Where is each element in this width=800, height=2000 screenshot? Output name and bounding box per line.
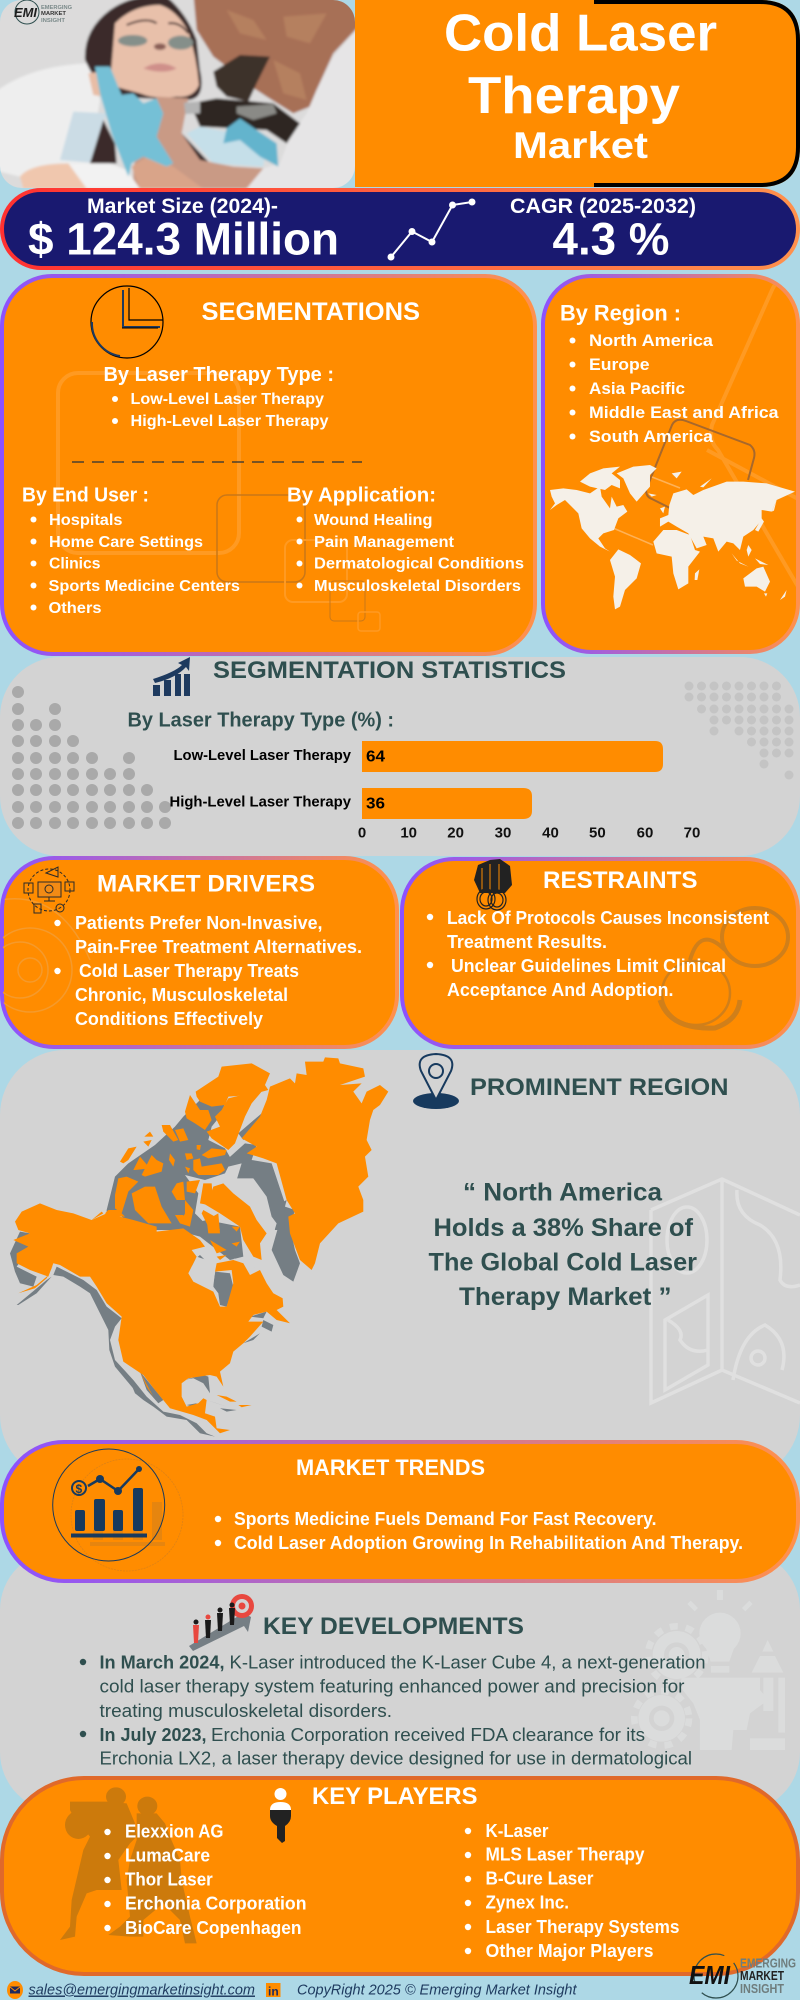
world map	[550, 465, 795, 609]
list: players left column: BioCare Copenhagen	[125, 1918, 302, 1938]
icon: bar chart with dollar sign: $	[76, 1482, 82, 1496]
logo: Emerging Market Insight: INSIGHT	[740, 1982, 784, 1996]
icon: handcuffs and fist	[474, 859, 512, 910]
panel: key developments	[0, 1550, 800, 1812]
list: by application: Musculoskeletal Disorders	[314, 578, 521, 595]
panel: prominent region: PROMINENT REGION	[470, 1074, 728, 1101]
text block: development items	[80, 1652, 706, 1768]
list: by application: Pain Management	[314, 534, 455, 551]
panel: market drivers: Chronic, Musculoskeletal	[75, 985, 288, 1005]
icon: rising bars with arrow	[153, 657, 190, 696]
panel: by region: Middle East and Africa	[589, 403, 779, 422]
list: by application: By Application:	[287, 484, 436, 506]
panel: market drivers: Cold Laser Therapy Treats	[79, 961, 299, 981]
logo on photo	[14, 0, 72, 24]
list: by laser therapy type: High-Level Laser Therapy	[130, 413, 329, 430]
list: players right column: Laser Therapy Systems	[486, 1917, 680, 1937]
list: by laser therapy type: By Laser Therapy Type :	[104, 364, 334, 386]
bar chart: High-Level Laser Therapy	[170, 794, 351, 810]
text block: development items: Erchonia LX2, a laser therapy device designed for use in dermatological	[100, 1748, 692, 1768]
text block: development items: In July 2023,	[100, 1725, 206, 1745]
bar chart: 40	[542, 824, 559, 842]
icon: location pin	[413, 1054, 459, 1109]
decorative gears, bulb and pencil	[634, 1590, 785, 1750]
panel: by region: By Region :	[560, 300, 681, 326]
panel: key players	[2, 1778, 798, 1974]
bar chart: Low-Level Laser Therapy	[174, 748, 351, 764]
quote: North America share: “ North America	[463, 1178, 663, 1206]
quote: North America share	[428, 1178, 697, 1311]
panel: market drivers: MARKET DRIVERS	[97, 870, 315, 898]
panel: segmentations	[2, 276, 535, 654]
bar chart: 60	[637, 824, 653, 842]
panel: by region: North America	[589, 331, 714, 350]
panel: segmentation statistics: SEGMENTATION STATISTICS	[213, 657, 566, 684]
panel: market drivers: Conditions Effectively	[75, 1009, 263, 1029]
text block: development items: cold laser therapy system featuring enhanced power and precision for	[100, 1676, 685, 1696]
panel: market drivers: Patients Prefer Non-Invasive,	[75, 913, 322, 933]
decorative dots left	[12, 686, 171, 829]
list: by end user: By End User :	[22, 484, 149, 506]
icon: marketing cycle	[24, 867, 74, 913]
bar chart	[170, 741, 700, 842]
icon: bar chart with dollar sign	[53, 1449, 183, 1571]
icon: LinkedIn: in	[268, 1984, 279, 1998]
list: players left column: LumaCare	[125, 1846, 210, 1866]
panel: market trends: Sports Medicine Fuels Demand For Fast Recovery.	[234, 1509, 656, 1529]
icon: pie chart	[91, 286, 163, 358]
panel: prominent region	[0, 1050, 800, 1480]
bar chart: 50	[589, 824, 606, 842]
list: players right column	[465, 1821, 680, 1961]
panel: by region: Asia Pacific	[589, 379, 685, 398]
quote: North America share: The Global Cold Laser	[428, 1248, 697, 1276]
text block: development items: K-Laser introduced the K-Laser Cube 4, a next-generation	[230, 1652, 706, 1672]
panel: market trends: Cold Laser Adoption Growing In Rehabilitation And Therapy.	[234, 1533, 743, 1553]
panel: segmentation statistics: By Laser Therapy Type (%) :	[128, 710, 394, 732]
list: players right column: B-Cure Laser	[486, 1868, 594, 1888]
decorative dots right	[684, 682, 794, 780]
panel: restraints: RESTRAINTS	[543, 867, 698, 894]
list: players right column: Zynex Inc.	[486, 1892, 569, 1912]
list: players right column: Other Major Players	[486, 1941, 654, 1961]
title panel: Cold Laser	[444, 4, 717, 62]
panel: by region	[543, 276, 800, 652]
list: by application: Wound Healing	[314, 512, 432, 529]
list: by end user: Hospitals	[49, 512, 123, 529]
list: players left column	[104, 1822, 306, 1938]
list: players right column: MLS Laser Therapy	[486, 1844, 644, 1864]
footer: contact and copyright: CopyRight 2025 © Emerging Market Insight	[297, 1982, 577, 1998]
bar chart: 36	[366, 796, 385, 812]
footer: contact and copyright: sales@emergingmarketinsight.com	[28, 1982, 255, 1998]
bar chart: 70	[684, 824, 700, 842]
text block: development items: In March 2024,	[100, 1652, 224, 1672]
text block: development items: treating musculoskeletal disorders.	[100, 1701, 392, 1721]
logo on photo: EMI	[14, 5, 37, 20]
title panel: Market	[513, 125, 648, 166]
panel: market trends	[2, 1442, 798, 1581]
list: by laser therapy type	[104, 364, 334, 430]
stat bar: market size and CAGR: 4.3 %	[552, 214, 670, 264]
text block: development items: Erchonia Corporation received FDA clearance for its	[211, 1725, 645, 1745]
list: by end user: Clinics	[49, 556, 101, 572]
header photo: patient receiving laser treatment	[0, 0, 362, 200]
bar chart: 20	[447, 824, 464, 842]
stat bar: market size and CAGR: $ 124.3 Million	[28, 214, 339, 264]
panel: key players: KEY PLAYERS	[312, 1783, 478, 1810]
list: by laser therapy type: Low-Level Laser Therapy	[130, 391, 324, 408]
footer: contact and copyright	[7, 1954, 796, 1999]
quote: North America share: Therapy Market ”	[459, 1283, 672, 1311]
stat bar: market size and CAGR: Market Size (2024)-	[87, 195, 278, 218]
stat bar: market size and CAGR	[2, 190, 798, 268]
list: players left column: Erchonia Corporation	[125, 1894, 306, 1914]
list: players left column: Elexxion AG	[125, 1822, 224, 1842]
icon: climbers on arrow to target	[189, 1594, 254, 1651]
panel: restraints: Acceptance And Adoption.	[447, 980, 674, 1000]
panel: by region: Europe	[589, 355, 650, 374]
panel: by region: South America	[589, 427, 714, 446]
logo on photo: EMERGING	[41, 5, 72, 11]
title panel	[355, 0, 800, 187]
bar chart: 30	[495, 824, 511, 842]
list: by end user: Home Care Settings	[49, 534, 203, 551]
logo on photo: INSIGHT	[41, 18, 66, 24]
bar chart: 64	[366, 748, 385, 766]
quote: North America share: Holds a 38% Share of	[434, 1214, 694, 1242]
list: by application	[287, 484, 524, 595]
logo: Emerging Market Insight: MARKET	[740, 1969, 784, 1983]
bar chart: 10	[400, 824, 417, 842]
list: by end user: Others	[48, 600, 102, 617]
list: by end user	[22, 484, 240, 617]
panel: segmentations: SEGMENTATIONS	[202, 298, 420, 326]
North America map	[10, 1057, 388, 1437]
decorative silhouettes	[60, 1787, 197, 1943]
list: players left column: Thor Laser	[125, 1870, 213, 1890]
decorative folded map	[651, 1179, 800, 1403]
panel: segmentation statistics	[0, 657, 800, 856]
panel: market trends: MARKET TRENDS	[296, 1455, 485, 1480]
icon: growth line	[388, 200, 474, 260]
panel: restraints: Lack Of Protocols Causes Inconsistent	[447, 908, 769, 928]
logo: Emerging Market Insight	[689, 1954, 796, 1998]
panel: market drivers: Pain-Free Treatment Alternatives.	[75, 937, 362, 957]
panel: market drivers	[0, 858, 397, 1047]
panel: restraints: Treatment Results.	[447, 932, 607, 952]
stat bar: market size and CAGR: CAGR (2025-2032)	[510, 195, 696, 218]
logo: Emerging Market Insight: EMI	[689, 1960, 731, 1990]
logo on photo: MARKET	[41, 11, 67, 17]
list: players right column: K-Laser	[486, 1821, 548, 1841]
icon: key	[270, 1788, 291, 1843]
list: by end user: Sports Medicine Centers	[48, 578, 240, 595]
panel: restraints	[402, 859, 798, 1047]
title panel: Therapy	[468, 67, 680, 125]
icon: LinkedIn	[266, 1983, 280, 1998]
list: by application: Dermatological Conditions	[314, 556, 524, 572]
panel: key developments: KEY DEVELOPMENTS	[263, 1613, 524, 1640]
panel: restraints: Unclear Guidelines Limit Clinical	[451, 956, 726, 976]
bar chart: 0	[358, 824, 366, 842]
icon: email	[7, 1981, 23, 1999]
